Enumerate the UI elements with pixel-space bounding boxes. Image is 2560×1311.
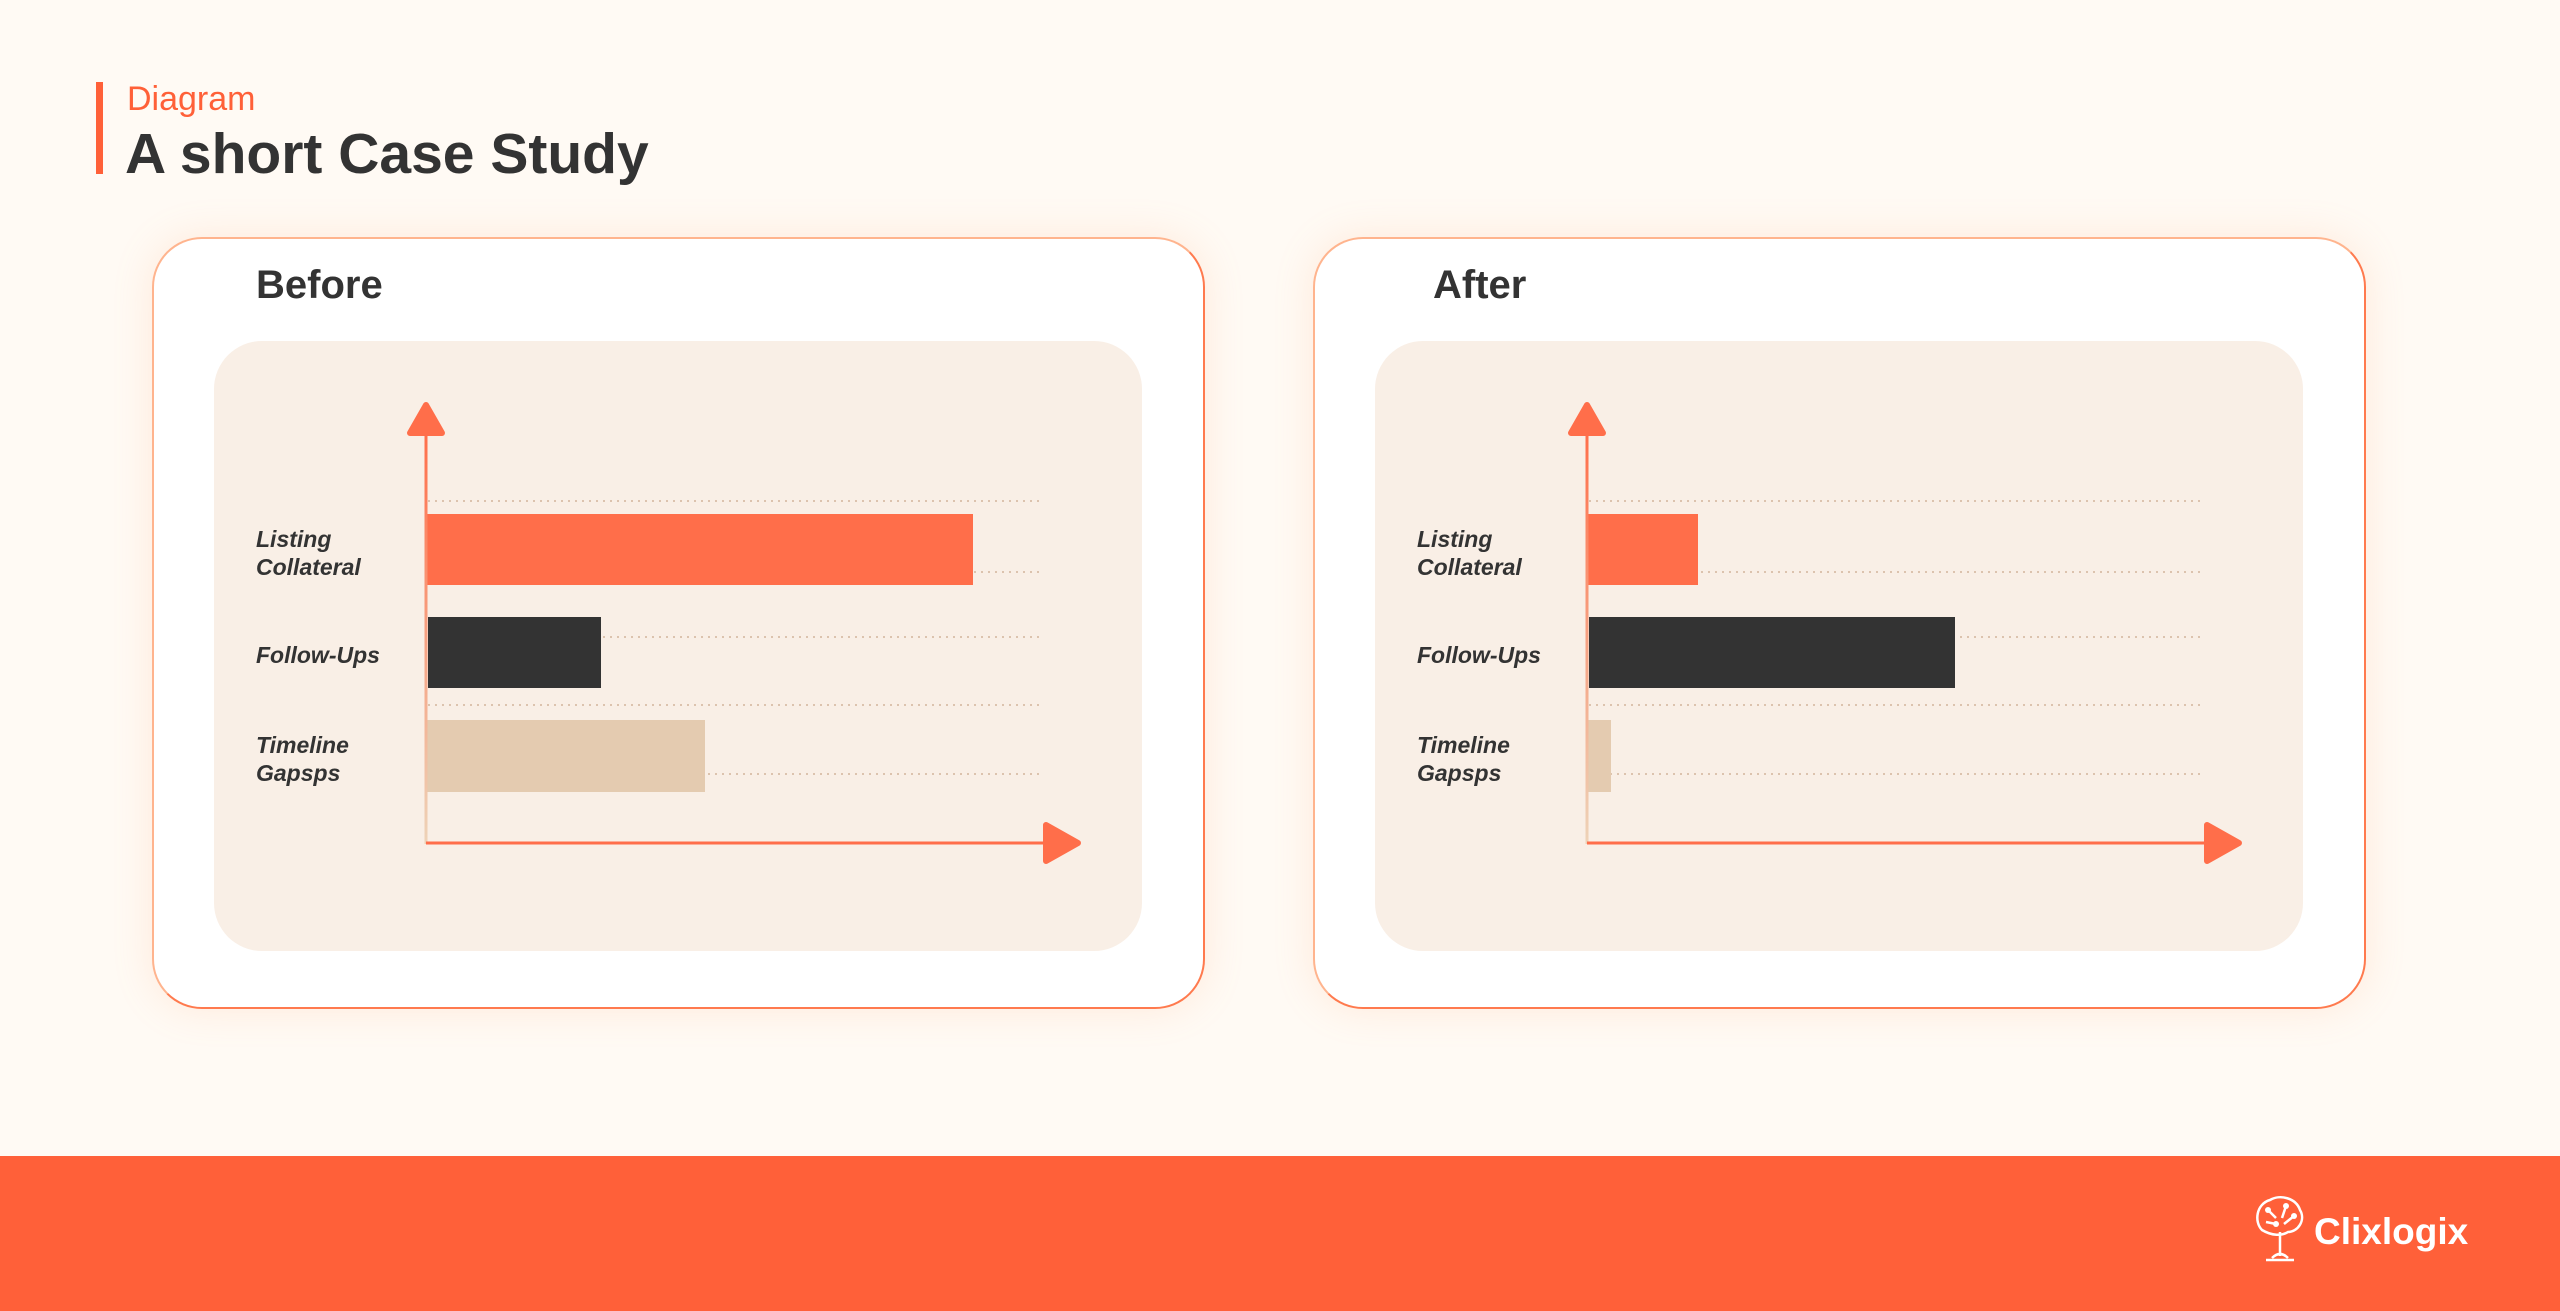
chart: before: Timeline — [256, 732, 349, 758]
heading: before: Before — [256, 263, 383, 307]
chart: after: Timeline — [1417, 732, 1510, 758]
chart: after: Listing — [1417, 526, 1492, 552]
chart: after: Gapsps — [1417, 760, 1501, 786]
chart: before — [214, 341, 1142, 951]
subtitle: Diagram — [127, 80, 255, 118]
panel: before — [152, 237, 1205, 1009]
panel: after — [1313, 237, 2366, 1009]
chart: after: Collateral — [1417, 554, 1522, 580]
chart: after: Follow-Ups — [1417, 642, 1541, 668]
accent bar — [96, 82, 103, 174]
heading: after: After — [1433, 263, 1526, 307]
footer band — [0, 1156, 2560, 1311]
icon: tree — [2256, 1196, 2304, 1262]
chart: before: Follow-Ups — [256, 642, 380, 668]
chart: after — [1375, 341, 2303, 951]
chart: before: Gapsps — [256, 760, 340, 786]
heading: A short Case Study — [125, 122, 649, 186]
logo — [2256, 1196, 2468, 1262]
chart: before: Listing — [256, 526, 331, 552]
title block — [96, 80, 649, 186]
logo text: Clixlogix — [2314, 1211, 2468, 1252]
chart: before: Collateral — [256, 554, 361, 580]
